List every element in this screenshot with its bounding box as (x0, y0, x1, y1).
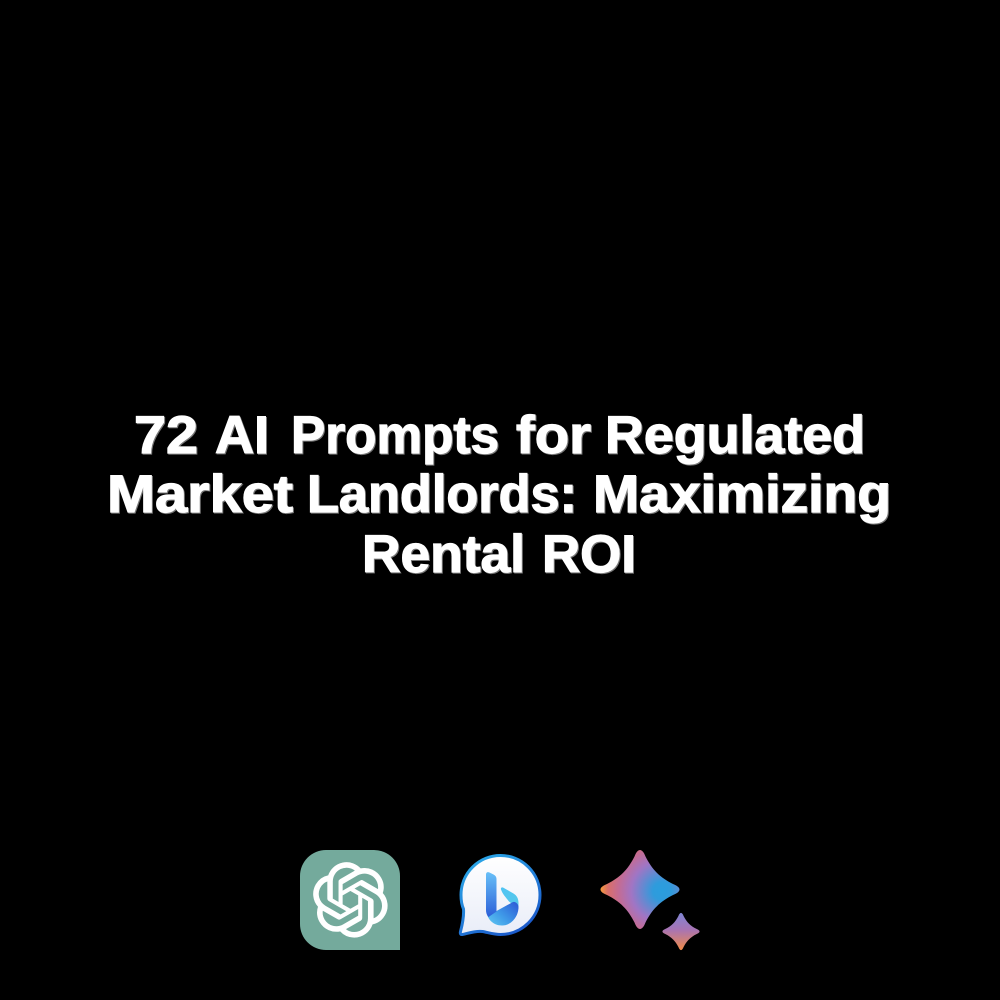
icon: ChatGPT logo (300, 850, 400, 950)
title (107, 406, 891, 584)
title: Regulated (605, 406, 865, 465)
title: for (516, 406, 591, 465)
icon: Gemini small star (662, 913, 700, 950)
title: Prompts (291, 406, 499, 465)
title: Landlords: (307, 465, 577, 524)
Bing b: stem (486, 872, 496, 917)
icon: Gemini large star (600, 850, 680, 929)
Bing b: upper right piece (501, 887, 518, 909)
title: Maximizing (593, 465, 891, 524)
icon: Bing chat bubble (460, 856, 540, 935)
Bing b: lower swoop (486, 902, 518, 926)
title: ROI (542, 525, 636, 584)
title: Rental (362, 525, 525, 584)
title: Market (107, 465, 293, 524)
title: 72 (134, 406, 198, 465)
title: AI (215, 406, 269, 465)
